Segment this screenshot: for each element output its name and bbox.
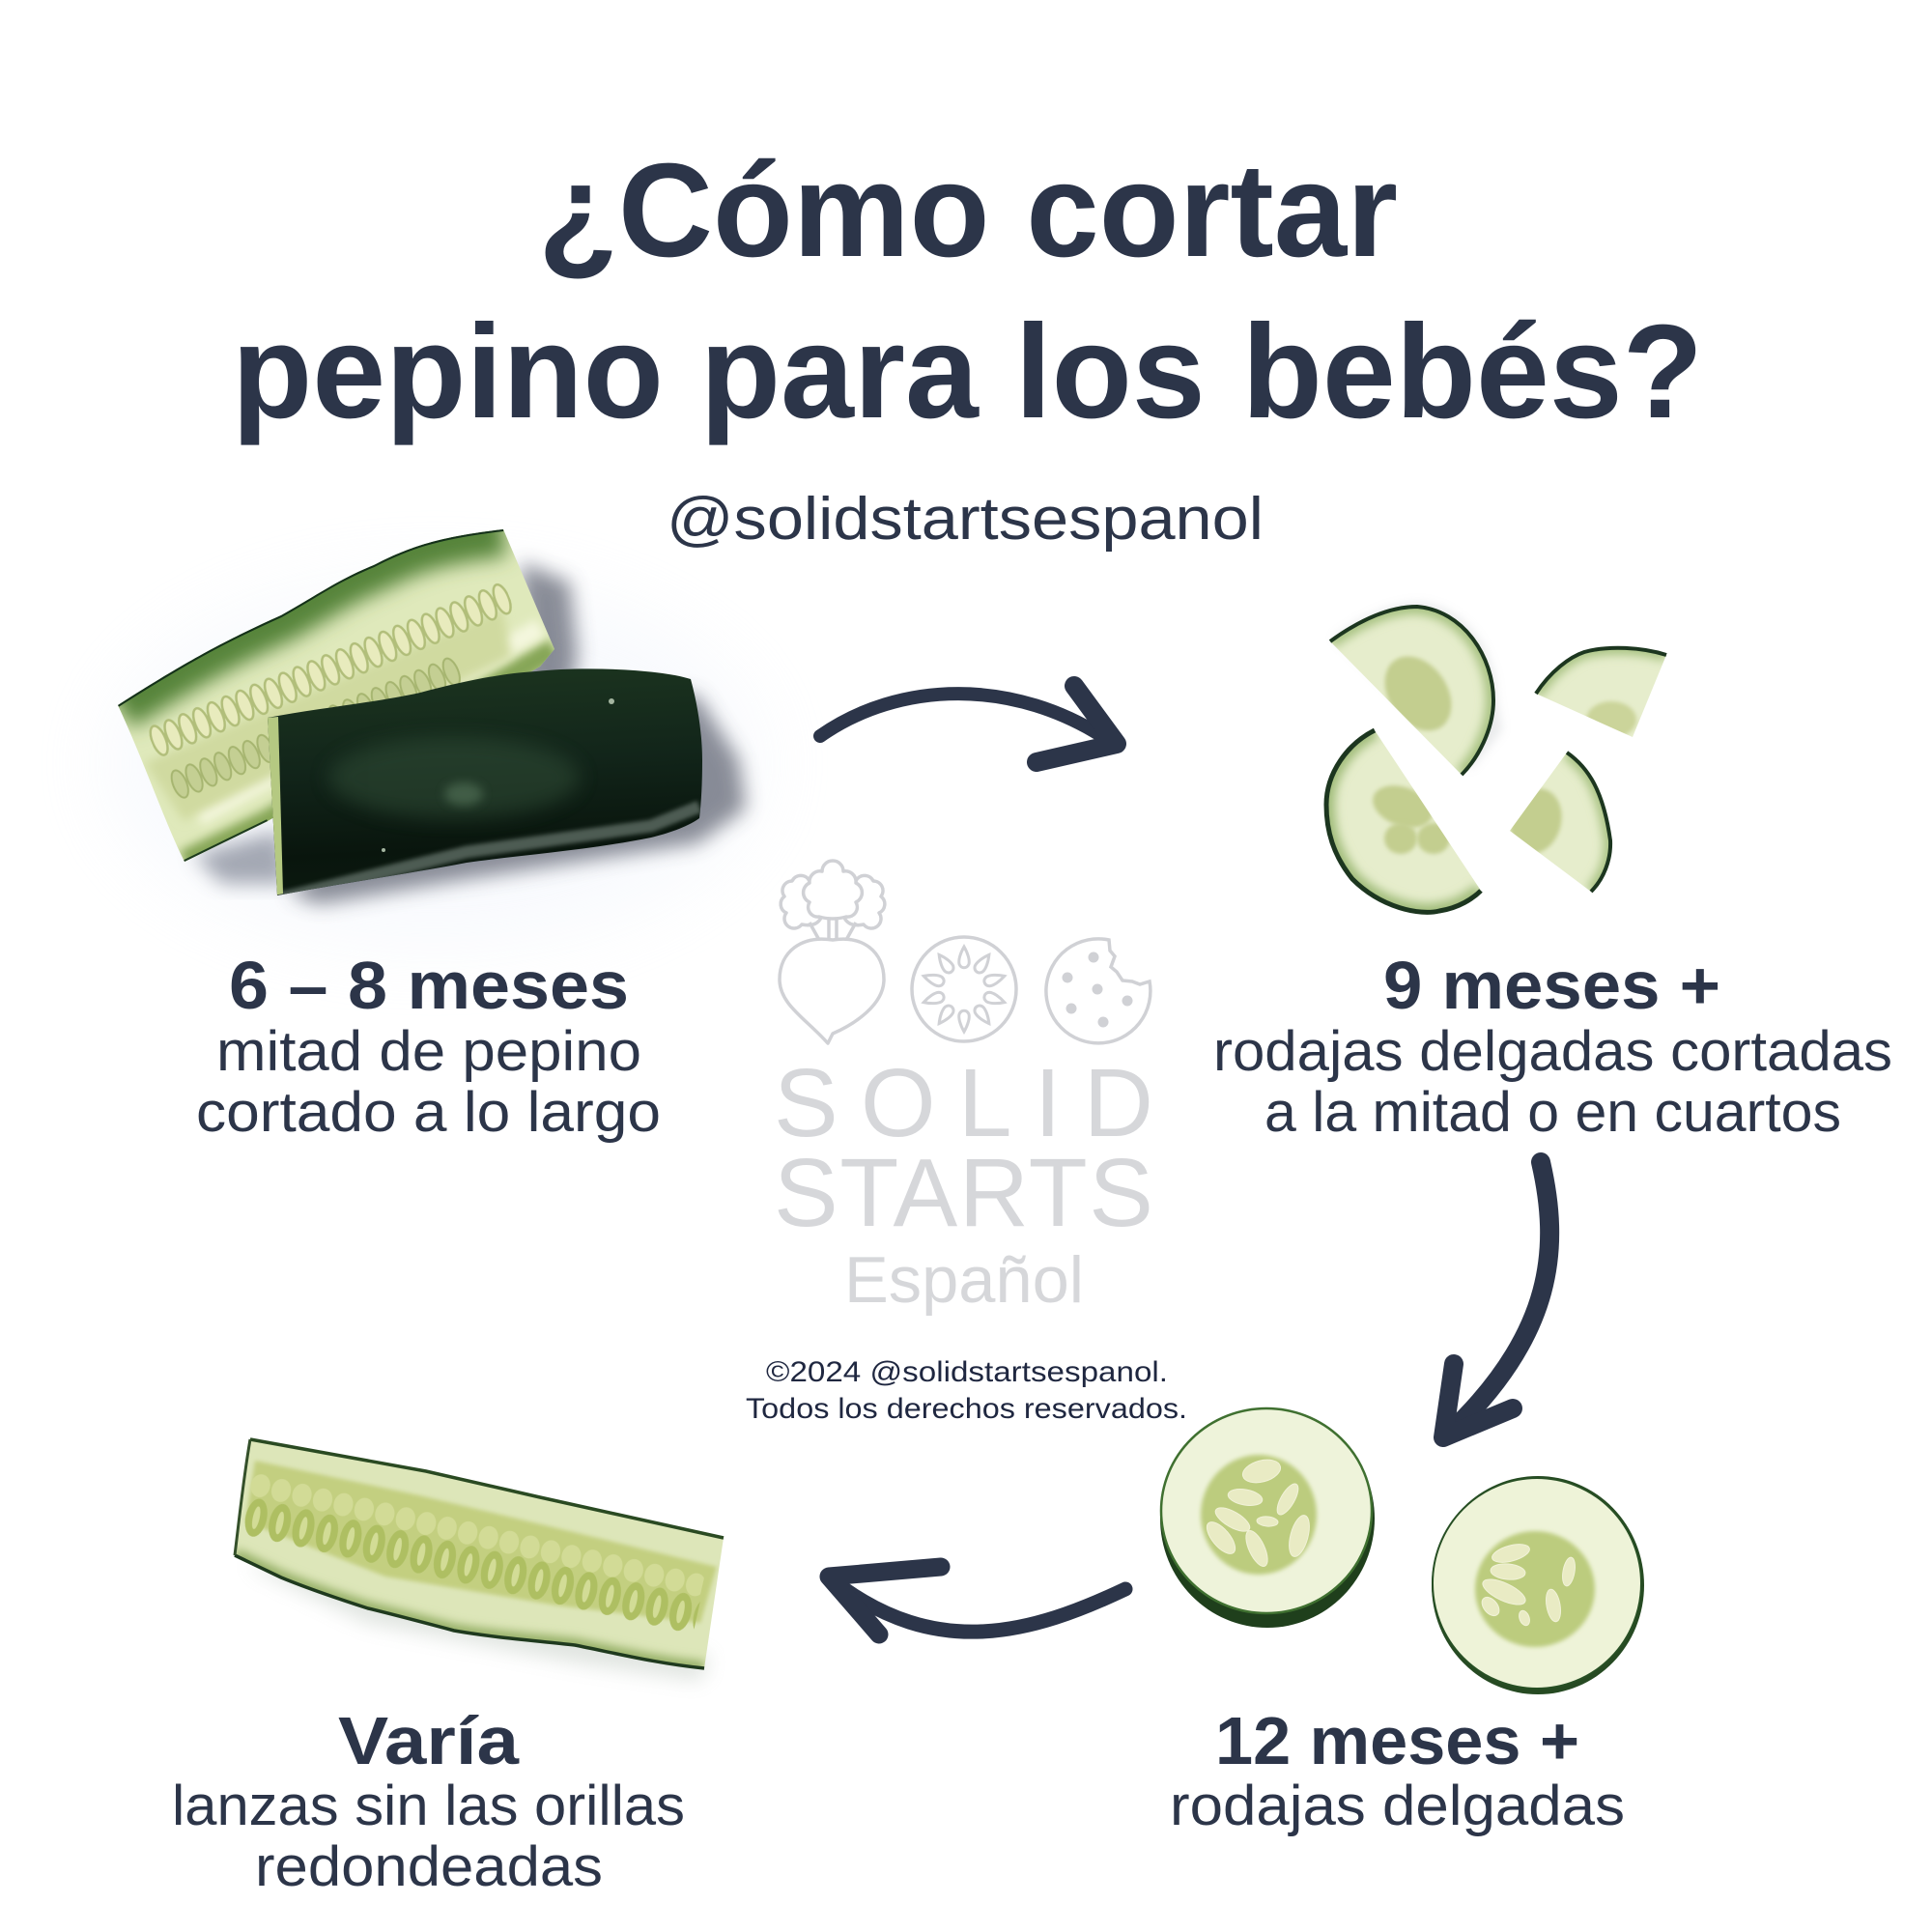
label: 6-8 months: cortado a lo largo [196, 1081, 661, 1144]
icon: beet [780, 861, 885, 1043]
label: varies: Varía [338, 1703, 520, 1778]
label: 12 months: rodajas delgadas [1170, 1775, 1625, 1837]
icon: cucumber slice [912, 937, 1016, 1041]
label: 9 months: 9 meses + [1383, 948, 1720, 1023]
arrow: 9 to 12 months [1443, 1162, 1549, 1437]
label: 6-8 months: 6 – 8 meses [229, 948, 629, 1023]
label: 9 months: a la mitad o en cuartos [1264, 1081, 1841, 1144]
label: 9 months: rodajas delgadas cortadas [1213, 1020, 1892, 1083]
arrow: 6-8 to 9 months [820, 686, 1117, 762]
title: ¿Cómo cortar [538, 136, 1398, 285]
logo wordmark: STARTS [774, 1139, 1153, 1247]
label: varies: redondeadas [255, 1835, 603, 1898]
label: 9 months [1213, 948, 1892, 1144]
slice 1 [1160, 1408, 1375, 1628]
photo: cucumber lance [227, 1435, 729, 1681]
photo: quarter and half slices [1319, 599, 1671, 918]
copyright [746, 1356, 1187, 1425]
copyright: ©2024 @solidstartsespanol. [766, 1356, 1168, 1388]
label: 6-8 months: mitad de pepino [216, 1020, 641, 1083]
logo wordmark [774, 1049, 1153, 1317]
handle: @solidstartsespanol [667, 486, 1264, 553]
title [232, 136, 1703, 446]
label: 12 months [1170, 1703, 1625, 1837]
label: varies [172, 1703, 685, 1898]
copyright: Todos los derechos reservados. [746, 1393, 1187, 1425]
label: 6-8 months [196, 948, 661, 1144]
photo: halved cucumber pieces [118, 529, 760, 921]
logo wordmark: SOLID [774, 1049, 1153, 1157]
logo: Solid Starts Español [774, 861, 1153, 1317]
photo: round slices [1160, 1408, 1644, 1694]
label: varies: lanzas sin las orillas [172, 1775, 685, 1837]
logo wordmark: Español [844, 1243, 1084, 1317]
label: 12 months: 12 meses + [1215, 1703, 1579, 1778]
slice 2 [1432, 1476, 1644, 1694]
icon: cookie [1046, 939, 1151, 1043]
arrow: 12 months to varies [829, 1567, 1125, 1634]
title: pepino para los bebés? [232, 298, 1703, 446]
